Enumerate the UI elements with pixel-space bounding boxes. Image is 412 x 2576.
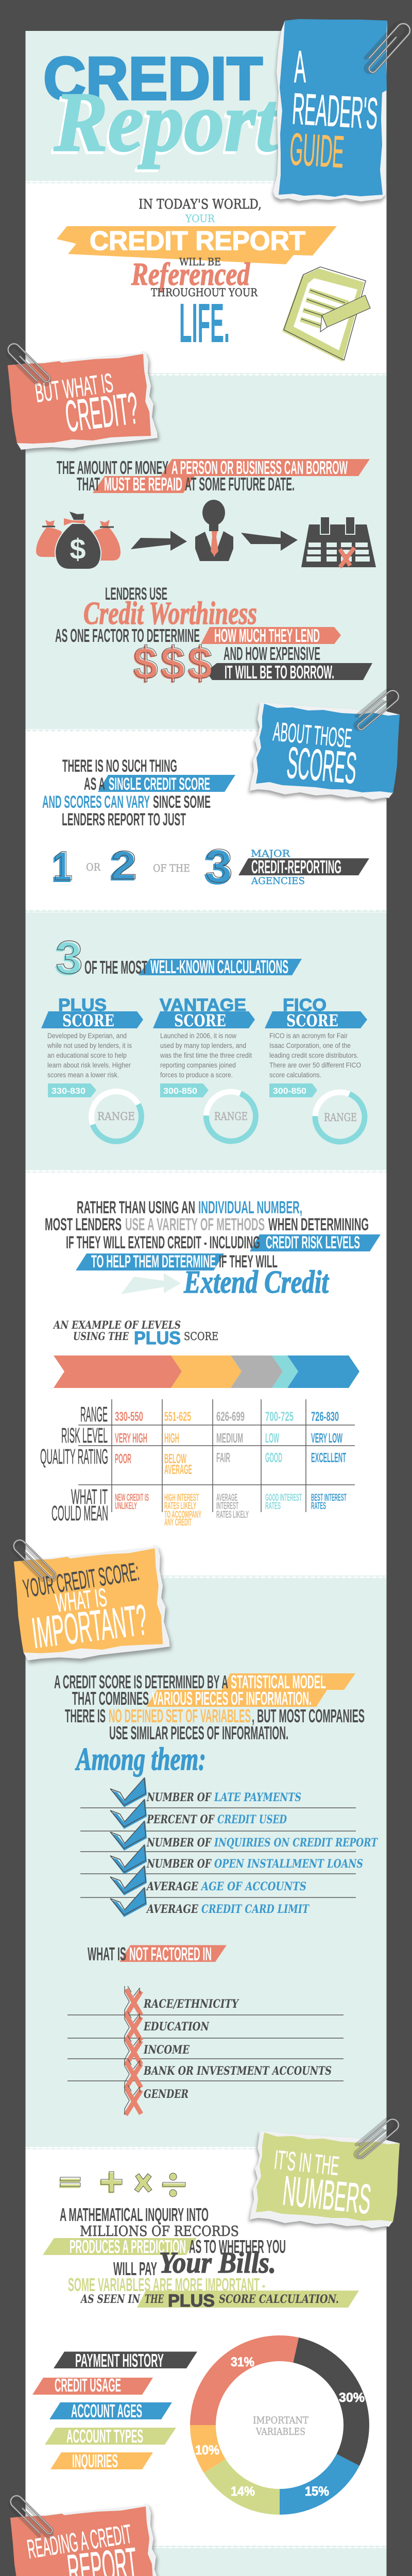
panel: Plus score: 330-830 — [52, 1086, 85, 1096]
panel: FICO score: RANGE — [324, 1111, 357, 1124]
text: no single credit score: SINCE SOME — [153, 792, 211, 812]
intro text block: LIFE. — [179, 292, 230, 354]
text: lenders use a variety of methods: Extend Credit — [183, 1265, 329, 1300]
checklist: factors in a credit score: NUMBER OF — [146, 1857, 212, 1871]
table: score levels: COULD MEAN — [52, 1501, 108, 1525]
chart: donut of important variables: 10% — [195, 2443, 219, 2458]
panel: Vantage score: forces to produce a score. — [160, 1071, 233, 1079]
text: definition of credit — [57, 457, 370, 495]
intro text block: IN TODAY'S WORLD, — [139, 197, 262, 212]
icon: calendar with future date — [301, 517, 376, 567]
numbers: 1 or 2 of the 3 major credit-reporting agencies: OF THE — [153, 862, 190, 874]
icon: borrower in suit — [195, 500, 233, 561]
list: not factored in: BANK OR INVESTMENT ACCOUNTS — [143, 2064, 332, 2078]
panel: Vantage score: Launched in 2006, it is now — [160, 1032, 236, 1040]
column: 700-725 low risk: RATES — [265, 1501, 281, 1512]
table: score levels: WHAT IT — [71, 1485, 108, 1509]
panel: Vantage score: used by many top lenders, and — [160, 1042, 246, 1049]
text: no single credit score: THERE IS NO SUCH THING — [62, 756, 177, 776]
numbers: 1 or 2 of the 3 major credit-reporting agencies: 2 — [110, 843, 135, 889]
icon: report document with pencil — [282, 267, 370, 362]
panel: FICO score: There are over 50 different FICO — [269, 1061, 361, 1069]
panel: FICO score: Isaac Corporation, one of the — [269, 1042, 351, 1049]
title: Credit Report: Report — [54, 75, 280, 169]
icon: money bags: $ — [70, 533, 86, 565]
torn note: A Reader's Guide: A — [294, 41, 306, 92]
column: 700-725 low risk: 700-725 — [265, 1410, 294, 1424]
numbers: 1 or 2 of the 3 major credit-reporting agencies: OR — [86, 861, 101, 873]
heading: example of levels using the Plus score — [53, 1318, 218, 1348]
panel: Vantage score: 300-850 — [163, 1086, 197, 1096]
text: no single credit score: AS A — [84, 774, 105, 794]
checklist: factors in a credit score: CREDIT USED — [217, 1813, 287, 1826]
numbers: 1 or 2 of the 3 major credit-reporting agencies: MAJOR — [251, 848, 290, 859]
checklist: factors in a credit score: AVERAGE — [146, 1880, 199, 1893]
text: statistical model: NO DEFINED SET OF VARIABLES — [109, 1705, 251, 1726]
intro text block: CREDIT REPORT — [90, 226, 305, 256]
heading: what is not factored in — [88, 1943, 227, 1964]
text: mathematical inquiry: MILLIONS OF RECORDS — [80, 2224, 239, 2240]
legend: important variables: CREDIT USAGE — [55, 2375, 121, 2396]
torn note: Reading a credit report — [7, 2493, 162, 2576]
text: CREDIT? — [63, 383, 141, 442]
list: not factored in: INCOME — [143, 2043, 190, 2057]
text: lenders use credit worthiness — [55, 584, 372, 683]
checklist: factors in a credit score: CREDIT CARD LIMIT — [201, 1903, 310, 1916]
column: 726-830 very low risk — [311, 1410, 347, 1512]
panel: Vantage score: RANGE — [214, 1110, 248, 1123]
numbers: 1 or 2 of the 3 major credit-reporting agencies — [52, 840, 369, 894]
text: definition of credit: MUST BE REPAID — [104, 473, 182, 495]
heading: example of levels using the Plus score: SCORE — [184, 1330, 218, 1343]
icon: three dollar signs: $ — [187, 638, 212, 689]
icon: three dollar signs: $ — [132, 638, 157, 689]
text: no single credit score: SINGLE CREDIT SCORE — [109, 774, 210, 794]
panel: Plus score: learn about risk levels. Higher — [47, 1061, 131, 1069]
text: mathematical inquiry — [43, 2204, 359, 2311]
panel: Vantage score — [153, 995, 255, 1141]
panel: FICO score: leading credit score distributors. — [269, 1052, 358, 1059]
text: lenders use credit worthiness: AS ONE FACTOR TO DETERMINE — [55, 625, 200, 646]
legend: important variables: ACCOUNT TYPES — [66, 2426, 143, 2447]
torn note: Your credit score, what is important? — [10, 1537, 171, 1664]
panel: Vantage score: VANTAGE — [160, 995, 246, 1015]
column: 626-699 medium risk: INTEREST — [216, 1501, 238, 1512]
intro text block: YOUR — [185, 212, 215, 225]
icon: paper clip — [360, 19, 412, 75]
intro text block: Referenced — [131, 257, 250, 292]
heading: what is not factored in: WHAT IS — [88, 1943, 126, 1964]
column: 330-550 very high risk — [115, 1410, 149, 1512]
checklist: factors in a credit score: NUMBER OF — [146, 1791, 212, 1804]
table: score levels: QUALITY RATING — [40, 1445, 108, 1468]
panel: FICO score: FICO is an acronym for Fair — [269, 1032, 348, 1040]
list: not factored in — [67, 1986, 344, 2115]
chart: donut of important variables: 14% — [231, 2484, 255, 2499]
heading: what is not factored in: NOT FACTORED IN — [129, 1943, 212, 1964]
checklist: factors in a credit score: AVERAGE — [146, 1903, 199, 1916]
numbers: 1 or 2 of the 3 major credit-reporting agencies: 1 — [52, 844, 71, 890]
text: mathematical inquiry: AS SEEN IN — [80, 2293, 141, 2306]
panel: FICO score — [265, 995, 367, 1142]
arrow: borrower to date — [241, 531, 298, 551]
text: mathematical inquiry: PLUS — [168, 2291, 215, 2311]
panel: Vantage score: SCORE — [174, 1011, 226, 1030]
column: 726-830 very low risk: RATES — [311, 1501, 326, 1512]
text: statistical model: A CREDIT SCORE IS DETERMINED BY A — [54, 1671, 228, 1692]
panel: Vantage score: reporting companies joined — [160, 1061, 236, 1069]
icon: money bags — [36, 512, 121, 569]
panel: Plus score: SCORE — [62, 1011, 114, 1030]
list: not factored in: GENDER — [144, 2088, 188, 2101]
heading: example of levels using the Plus score: USING THE — [73, 1330, 129, 1343]
text: lenders use a variety of methods: MOST LENDERS — [45, 1215, 122, 1234]
title: Credit Report — [43, 45, 280, 172]
table: score levels — [40, 1399, 355, 1528]
title: Credit Report: CREDIT — [43, 45, 263, 113]
column: 626-699 medium risk: 626-699 — [216, 1410, 245, 1424]
checklist: factors in a credit score — [80, 1777, 378, 1917]
checklist: factors in a credit score: PERCENT OF — [146, 1813, 215, 1826]
legend: important variables: ACCOUNT AGES — [71, 2400, 142, 2421]
icon: math symbols — [59, 2172, 185, 2197]
column: 551-625 high risk: 551-625 — [164, 1410, 191, 1424]
heading: example of levels using the Plus score: AN EXAMPLE OF LEVELS — [53, 1318, 181, 1331]
text: lenders use a variety of methods — [45, 1198, 381, 1300]
numbers: 1 or 2 of the 3 major credit-reporting agencies: 3 — [205, 840, 233, 892]
panel: Plus score: while not used by lenders, it is — [47, 1042, 132, 1049]
chart: donut of important variables: VARIABLES — [255, 2426, 305, 2437]
torn note: Reading a credit report: READING A CREDIT — [25, 2519, 133, 2565]
list: not factored in: EDUCATION — [143, 2020, 210, 2033]
heading: 3 of the most well-known calculations: 3 — [54, 934, 81, 985]
heading: 3 of the most well-known calculations — [54, 932, 302, 985]
arrow: pointing to extend credit — [121, 1273, 181, 1294]
numbers: 1 or 2 of the 3 major credit-reporting agencies: 2 — [111, 842, 137, 888]
text: statistical model: THERE IS — [65, 1705, 106, 1726]
legend: important variables: INQUIRIES — [72, 2450, 118, 2471]
legend: important variables — [32, 2350, 197, 2471]
intro text block: WILL BE — [179, 256, 221, 268]
icon: three dollar signs: $ — [161, 637, 185, 688]
intro text block — [57, 197, 337, 354]
text: mathematical inquiry: THE — [145, 2293, 164, 2306]
panel: FICO score: SCORE — [286, 1011, 338, 1030]
column: 551-625 high risk: AVERAGE — [164, 1462, 192, 1477]
torn note: About those scores — [249, 686, 401, 802]
panel: Plus score: RANGE — [97, 1110, 135, 1123]
text: mathematical inquiry: Your Bills. — [159, 2246, 276, 2279]
panel: Plus score: scores mean a lower risk. — [47, 1071, 119, 1079]
text: mathematical inquiry: A MATHEMATICAL INQUIRY INTO — [60, 2204, 209, 2225]
panel: Plus score: Developed by Experian, and — [47, 1032, 127, 1040]
column: 551-625 high risk: ANY CREDIT — [164, 1517, 192, 1528]
text: lenders use credit worthiness: Credit Worthiness — [83, 596, 257, 631]
text: mathematical inquiry: AS TO WHETHER YOU — [189, 2236, 286, 2257]
panel: Plus score: PLUS — [58, 995, 107, 1015]
intro text block: THROUGHOUT YOUR — [151, 286, 258, 299]
column: 726-830 very low risk: 726-830 — [311, 1410, 339, 1424]
table: score levels: TO ACCOMPANY — [164, 1510, 201, 1520]
text: lenders use credit worthiness: LENDERS USE — [105, 584, 167, 604]
numbers: 1 or 2 of the 3 major credit-reporting agencies: 1 — [53, 843, 73, 889]
text: lenders use a variety of methods: RATHER THAN USING AN — [77, 1198, 195, 1217]
row labels — [40, 1402, 108, 1525]
text: mathematical inquiry: WILL PAY — [113, 2258, 157, 2279]
panel: Plus score: an educational score to help — [47, 1052, 127, 1059]
table: score levels: RANGE — [80, 1402, 108, 1426]
table: score levels: VERY HIGH — [115, 1430, 147, 1446]
text: definition of credit: AT SOME FUTURE DATE. — [185, 473, 295, 495]
torn note: Your credit score, what is important?: IMPORTANT? — [29, 1595, 150, 1657]
icon: three dollar signs: $ — [133, 637, 158, 688]
column: 551-625 high risk: BELOW — [164, 1451, 186, 1466]
torn note: It's in the numbers — [249, 2115, 401, 2231]
column: 551-625 high risk: HIGH — [164, 1430, 179, 1446]
text: no single credit score — [42, 756, 235, 829]
chart: donut of important variables: 15% — [305, 2484, 329, 2499]
heading: Among them: Among them: — [75, 1742, 206, 1777]
text: lenders use a variety of methods: TO HELP THEM DETERMINE — [91, 1252, 216, 1272]
text: definition of credit: THAT — [77, 473, 100, 495]
legend: important variables: PAYMENT HISTORY — [75, 2350, 164, 2371]
chart: donut of important variables: IMPORTANT — [253, 2415, 308, 2426]
torn note: Your credit score, what is important?: YOUR CREDIT SCORE: — [21, 1557, 141, 1603]
panel: FICO score: FICO — [283, 995, 327, 1015]
list: not factored in: RACE/ETHNICITY — [143, 1997, 239, 2011]
torn note: But what is credit? — [4, 341, 159, 452]
text: statistical model: THAT COMBINES — [72, 1688, 149, 1709]
panel: Vantage score: was the first time the three credit — [160, 1052, 252, 1059]
text: no single credit score: AND SCORES CAN VARY — [42, 792, 150, 812]
table: score levels: GOOD INTEREST — [265, 1493, 302, 1503]
text: mathematical inquiry: PRODUCES A PREDICTION — [70, 2236, 186, 2257]
checklist: factors in a credit score: LATE PAYMENTS — [214, 1791, 301, 1804]
text: no single credit score: LENDERS REPORT TO JUST — [62, 810, 186, 829]
title: Credit Report: Report — [52, 77, 278, 172]
arrow: money to borrower — [131, 531, 187, 551]
column: 726-830 very low risk: VERY LOW — [311, 1430, 342, 1446]
checklist: factors in a credit score: OPEN INSTALLMENT LOANS — [214, 1857, 363, 1871]
table: score levels: BEST INTEREST — [311, 1493, 347, 1503]
chart: risk level arrows — [54, 1355, 359, 1388]
text: lenders use a variety of methods: IF THEY WILL — [219, 1252, 278, 1272]
torn note: A Reader's Guide — [272, 19, 387, 205]
table: score levels: EXCELLENT — [311, 1450, 346, 1465]
text: lenders use a variety of methods: USE A VARIETY OF METHODS — [125, 1215, 265, 1234]
icon: three dollar signs: $ — [160, 638, 184, 689]
text: lenders use a variety of methods: INDIVIDUAL NUMBER, — [198, 1198, 302, 1217]
icon: three dollar signs — [132, 637, 213, 689]
column: 330-550 very high risk: 330-550 — [115, 1410, 143, 1424]
checklist: factors in a credit score: AGE OF ACCOUNTS — [200, 1880, 306, 1893]
column: 330-550 very high risk: UNLIKELY — [115, 1501, 137, 1512]
table: score levels: RATES LIKELY — [216, 1510, 249, 1520]
torn note: But what is credit?: BUT WHAT IS — [33, 368, 115, 409]
numbers: 1 or 2 of the 3 major credit-reporting agencies: AGENCIES — [251, 875, 305, 887]
text: mathematical inquiry: SCORE CALCULATION. — [219, 2293, 339, 2306]
column: 626-699 medium risk: AVERAGE — [216, 1493, 237, 1503]
panel: FICO score: 300-850 — [273, 1086, 306, 1096]
heading: 3 of the most well-known calculations: OF THE MOST — [84, 957, 147, 978]
column: 626-699 medium risk — [216, 1410, 249, 1520]
heading: example of levels using the Plus score: PLUS — [134, 1328, 181, 1348]
chart: donut of important variables: 30% — [339, 2391, 365, 2405]
panel: Plus score — [41, 995, 143, 1142]
column: 551-625 high risk: RATES LIKELY — [164, 1501, 196, 1512]
heading: 3 of the most well-known calculations: 3 — [56, 932, 83, 984]
panel: FICO score: score calculations. — [269, 1071, 321, 1079]
text: definition of credit: THE AMOUNT OF MONEY — [57, 457, 168, 478]
table: score levels: NEW CREDIT IS — [115, 1493, 149, 1503]
column: 700-725 low risk: LOW — [265, 1430, 279, 1446]
column: 626-699 medium risk: FAIR — [216, 1450, 230, 1465]
column: 626-699 medium risk: MEDIUM — [216, 1430, 243, 1446]
column: 700-725 low risk — [265, 1410, 302, 1512]
icon: three dollar signs: $ — [188, 637, 213, 688]
chart: donut of important variables: 31% — [231, 2355, 254, 2369]
torn note: Your credit score, what is important?: WHAT IS — [54, 1583, 109, 1618]
chart: donut of important variables — [190, 2335, 369, 2515]
column: 551-625 high risk — [164, 1410, 201, 1528]
table: score levels: RISK LEVEL — [61, 1423, 108, 1447]
column: 330-550 very high risk: POOR — [115, 1451, 131, 1466]
column: 700-725 low risk: GOOD — [265, 1450, 282, 1465]
numbers: 1 or 2 of the 3 major credit-reporting agencies: 3 — [204, 841, 231, 894]
table: score levels: HIGH INTEREST — [164, 1493, 199, 1503]
text: statistical model — [54, 1671, 365, 1743]
checklist: factors in a credit score: NUMBER OF — [146, 1836, 212, 1850]
